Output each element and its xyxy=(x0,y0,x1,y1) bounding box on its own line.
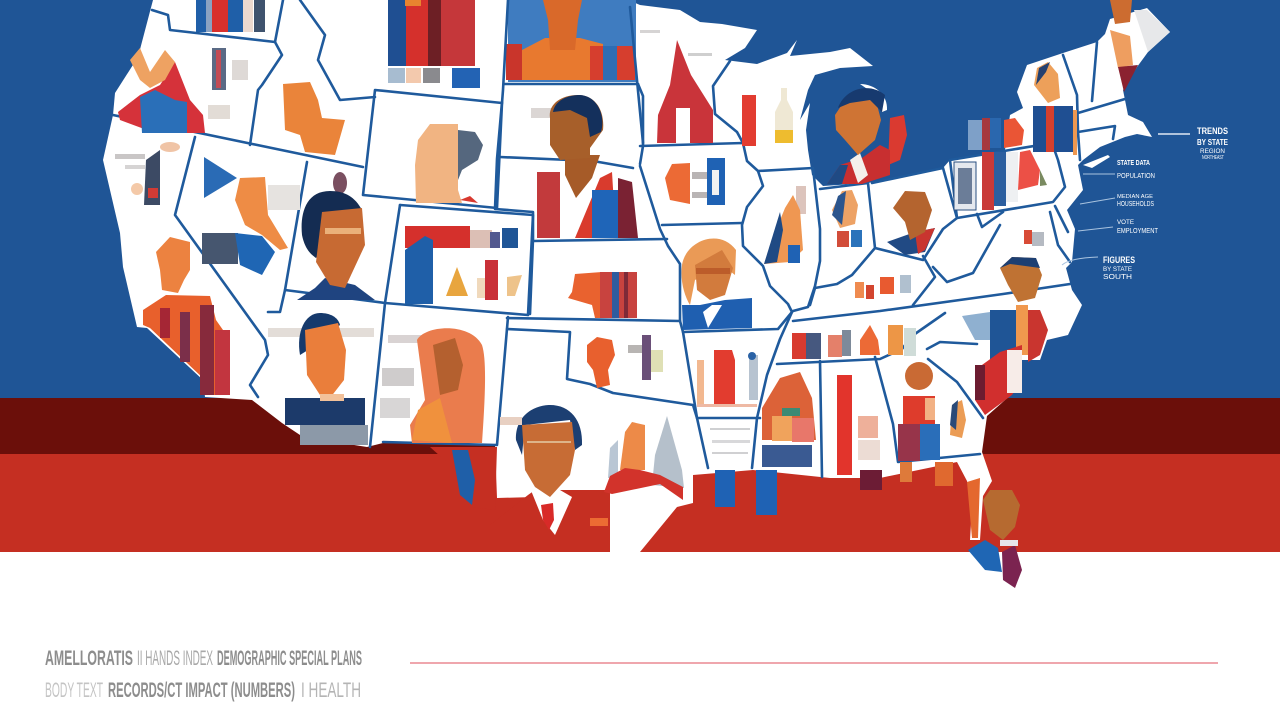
infographic canvas: DEMOGRAPHIC SPECIAL PLANS xyxy=(217,647,362,670)
callout: New England label xyxy=(1158,126,1229,161)
figure: North Dakota sky panel and person xyxy=(506,0,636,82)
callout: mid-Atlantic labels: VOTE xyxy=(1117,220,1134,226)
background: red band xyxy=(0,454,1280,552)
background: blue sea xyxy=(0,0,1280,398)
figure: Arkansas bars xyxy=(697,350,758,407)
background: white footer xyxy=(0,552,1280,720)
figure: Arizona person xyxy=(268,313,374,445)
figure: Arizona border colored shape xyxy=(430,447,497,510)
figure: Iowa chart xyxy=(665,158,725,205)
figure: Ohio person xyxy=(887,191,935,255)
figure: New Mexico woman xyxy=(380,328,485,443)
footer text: garbled caption: I HEALTH xyxy=(301,679,361,702)
figure: South Dakota and Nebraska man xyxy=(531,95,638,238)
footer divider line xyxy=(410,662,1218,664)
figure: Oklahoma person and small chart xyxy=(587,335,663,388)
figure: Nevada triangle and person xyxy=(202,157,300,275)
figure: Illinois person xyxy=(764,186,806,264)
figure: New York bars and person xyxy=(968,62,1077,155)
figure: Wyoming person xyxy=(415,124,483,203)
figure: Texas buildings xyxy=(500,416,684,500)
figure: Florida person xyxy=(967,478,1022,588)
callout: New England label: REGION xyxy=(1200,149,1225,155)
figure: Georgia figures and bars xyxy=(898,362,966,486)
figure: Michigan man xyxy=(827,84,907,184)
callout: New England label: BY STATE xyxy=(1197,138,1229,147)
figure: Kentucky bars xyxy=(855,275,911,299)
footer text: garbled caption: II HANDS INDEX xyxy=(137,647,213,670)
callout: mid-Atlantic labels: POPULATION xyxy=(1117,173,1155,180)
callout: Virginia label xyxy=(1062,255,1135,281)
figure: Montana bars xyxy=(388,0,480,88)
figure: Kansas orange and bars xyxy=(568,272,637,318)
figure: Oregon shapes xyxy=(118,48,248,133)
map: Long Island xyxy=(1083,155,1110,168)
footer text: garbled caption xyxy=(45,647,362,702)
figure: Utah person with glasses xyxy=(297,172,375,300)
callout: New England label: NORTHEAST xyxy=(1202,155,1224,161)
figure: Alabama bar xyxy=(837,375,882,490)
figure: Virginia and Carolinas person xyxy=(962,230,1048,415)
figure: Missouri woman xyxy=(681,238,752,330)
figure: Mississippi woman xyxy=(762,372,816,467)
callout: mid-Atlantic labels: MEDIAN AGE xyxy=(1117,194,1154,200)
figure: Maine person xyxy=(1110,0,1170,92)
footer text: garbled caption: RECORDS/CT IMPACT (NUMBERS) xyxy=(108,679,295,702)
footer text: garbled caption: BODY TEXT xyxy=(45,679,103,702)
callout: mid-Atlantic labels xyxy=(1078,160,1159,235)
map: white landmass xyxy=(103,0,1170,552)
figure: California chart and woman xyxy=(115,142,230,395)
callout: mid-Atlantic labels: STATE DATA xyxy=(1117,160,1150,167)
callout: Virginia label: BY STATE xyxy=(1103,267,1132,273)
figure: Colorado charts xyxy=(405,226,522,304)
figure: Wisconsin bar and bottle xyxy=(742,88,793,146)
figure: Minnesota house xyxy=(640,30,713,143)
figure: Texas man in red suit xyxy=(490,405,610,552)
callout: mid-Atlantic labels: EMPLOYMENT xyxy=(1117,228,1159,235)
figure: Louisiana notes xyxy=(710,428,777,515)
figure: Pennsylvania grid, bars and person xyxy=(954,150,1047,210)
callout: Virginia label: FIGURES xyxy=(1103,255,1135,265)
footer text: garbled caption: AMELLORATIS xyxy=(45,647,133,670)
callout: Virginia label: SOUTH xyxy=(1103,274,1132,281)
figure: Indiana person and small bars xyxy=(832,190,862,247)
callout: New England label: TRENDS xyxy=(1197,126,1228,136)
background: dark red band xyxy=(0,398,1280,454)
figure: Tennessee bars xyxy=(792,325,916,359)
callout: mid-Atlantic labels: HOUSEHOLDS xyxy=(1117,201,1154,208)
map: state borders xyxy=(113,0,1125,477)
figure: Idaho orange shape xyxy=(283,82,345,155)
figure: Washington bars xyxy=(196,0,265,32)
